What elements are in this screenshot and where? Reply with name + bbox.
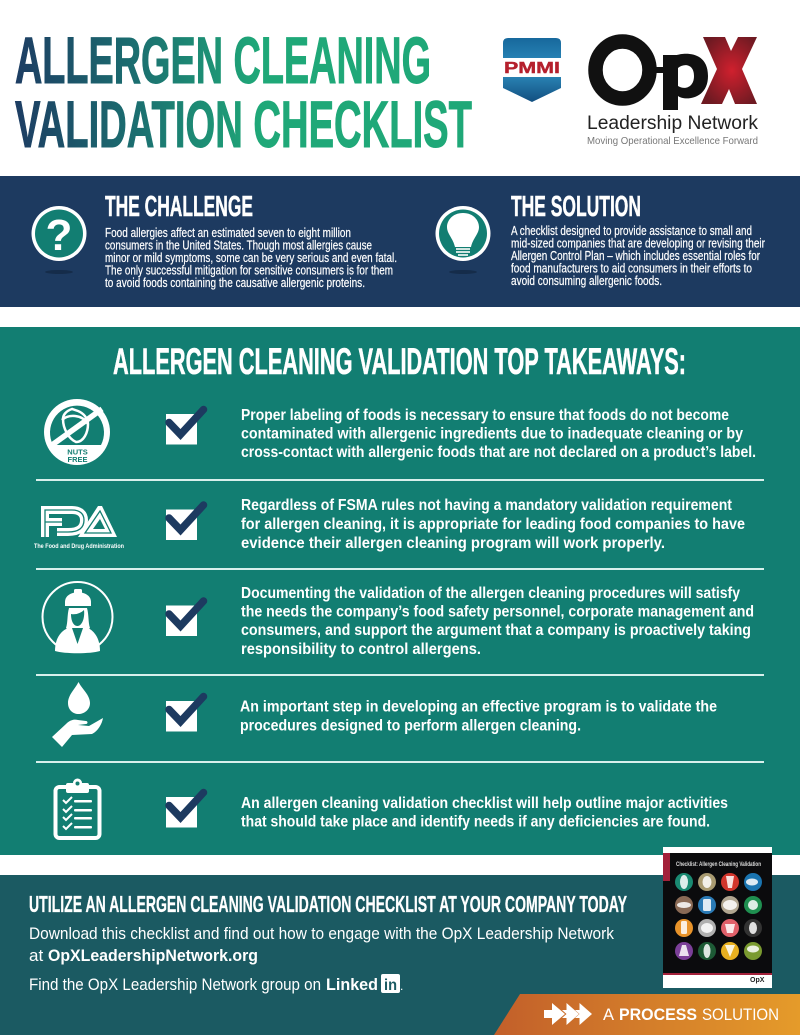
logo: OpX Leadership Network: Leadership Network	[587, 113, 758, 134]
challenge heading: THE CHALLENGE	[105, 191, 253, 223]
panel: top takeaways	[0, 327, 800, 855]
checklist booklet thumbnail: OpX	[750, 977, 765, 984]
challenge text: to avoid foods containing the causative allergenic proteins.	[105, 275, 365, 290]
title: ALLERGEN CLEANING	[15, 23, 431, 97]
takeaway text 1: Proper labeling of foods is necessary to ensure that foods do not become	[241, 407, 729, 424]
banner text	[603, 1006, 779, 1024]
checkbox 2	[166, 505, 204, 540]
takeaway text 2	[241, 497, 745, 552]
takeaway text 1: contaminated with allergenic ingredients due to inadequate cleaning or by	[241, 426, 743, 442]
takeaway text 5	[241, 795, 728, 830]
icon: water drop and hand	[52, 682, 103, 747]
takeaway text 3: Documenting the validation of the allergen cleaning procedures will satisfy	[241, 585, 740, 602]
LinkedIn text: .	[400, 979, 403, 993]
checklist booklet thumbnail	[663, 847, 772, 988]
takeaway text 2: Regardless of FSMA rules not having a mandatory validation requirement	[241, 497, 733, 514]
banner: a process solution	[494, 994, 800, 1035]
solution text: avoid consuming allergenic foods.	[511, 273, 662, 288]
LinkedIn text: Find the OpX Leadership Network group on	[29, 975, 321, 994]
banner text: PROCESS	[619, 1006, 697, 1024]
takeaway text 2: for allergen cleaning, it is appropriate for leading food companies to have	[241, 516, 745, 533]
icon: nuts free	[44, 399, 110, 465]
download text: at	[29, 946, 43, 965]
LinkedIn text: Linked	[326, 975, 378, 994]
banner text: SOLUTION	[702, 1006, 779, 1024]
logo: OpX Leadership Network	[587, 37, 758, 147]
takeaway text 3: responsibility to control allergens.	[241, 641, 481, 658]
icon: FDA logo: The Food and Drug Administration	[34, 544, 124, 550]
icon: worker with hard hat	[42, 582, 112, 653]
checkbox 5	[166, 792, 204, 828]
logo: PMMI	[503, 38, 561, 102]
panel: challenge and solution	[0, 176, 800, 307]
takeaway text 3: consumers, and support the argument that a company is proactively taking	[241, 622, 751, 639]
banner text: A	[603, 1006, 614, 1024]
logo: OpX Leadership Network: Moving Operational Excellence Forward	[587, 135, 758, 147]
challenge text: consumers in the United States. Though most allergies cause	[105, 238, 372, 252]
challenge text: The only successful mitigation for sensitive consumers is for them	[105, 262, 393, 278]
challenge text: minor or mild symptoms, some can be very serious and even fatal.	[105, 250, 397, 265]
LinkedIn text: in	[384, 977, 397, 994]
takeaway text 4	[240, 698, 717, 734]
download text: Download this checklist and find out how to engage with the OpX Leadership Network	[29, 924, 614, 943]
checkbox 4	[166, 696, 204, 732]
checkbox 3	[166, 601, 204, 636]
solution heading: THE SOLUTION	[511, 191, 641, 223]
icon: FDA logo	[34, 506, 124, 550]
challenge text	[105, 225, 397, 290]
title: VALIDATION CHECKLIST	[15, 87, 472, 161]
icon: clipboard checklist	[56, 778, 100, 838]
icon: question mark: ?	[46, 211, 72, 260]
takeaway text 5: An allergen cleaning validation checklist will help outline major activities	[241, 795, 728, 812]
takeaway text 5: that should take place and identify needs if any deficiencies are found.	[241, 814, 710, 830]
takeaway text 3	[241, 585, 754, 658]
takeaway text 1	[241, 407, 756, 461]
download text	[29, 924, 614, 965]
panel: call to action	[0, 875, 800, 1035]
checklist booklet thumbnail: Checklist: Allergen Cleaning Validation	[676, 861, 761, 868]
checkbox 1	[166, 410, 204, 444]
icon: light bulb	[436, 206, 490, 274]
title	[15, 23, 472, 161]
download text: OpXLeadershipNetwork.org	[48, 946, 258, 965]
takeaway text 2: evidence their allergen cleaning program will work properly.	[241, 535, 665, 552]
icon: nuts free: FREE	[67, 455, 88, 464]
icon: nuts free: NUTS	[67, 448, 88, 456]
solution text	[511, 223, 766, 288]
icon: triple arrows	[544, 1003, 592, 1025]
takeaway text 4: An important step in developing an effective program is to validate the	[240, 698, 717, 716]
challenge text: Food allergies affect an estimated seven to eight million	[105, 225, 351, 240]
takeaway text 4: procedures designed to perform allergen cleaning.	[240, 718, 581, 734]
logo: PMMI: PMMI	[504, 60, 560, 77]
icon: question mark	[32, 206, 86, 274]
